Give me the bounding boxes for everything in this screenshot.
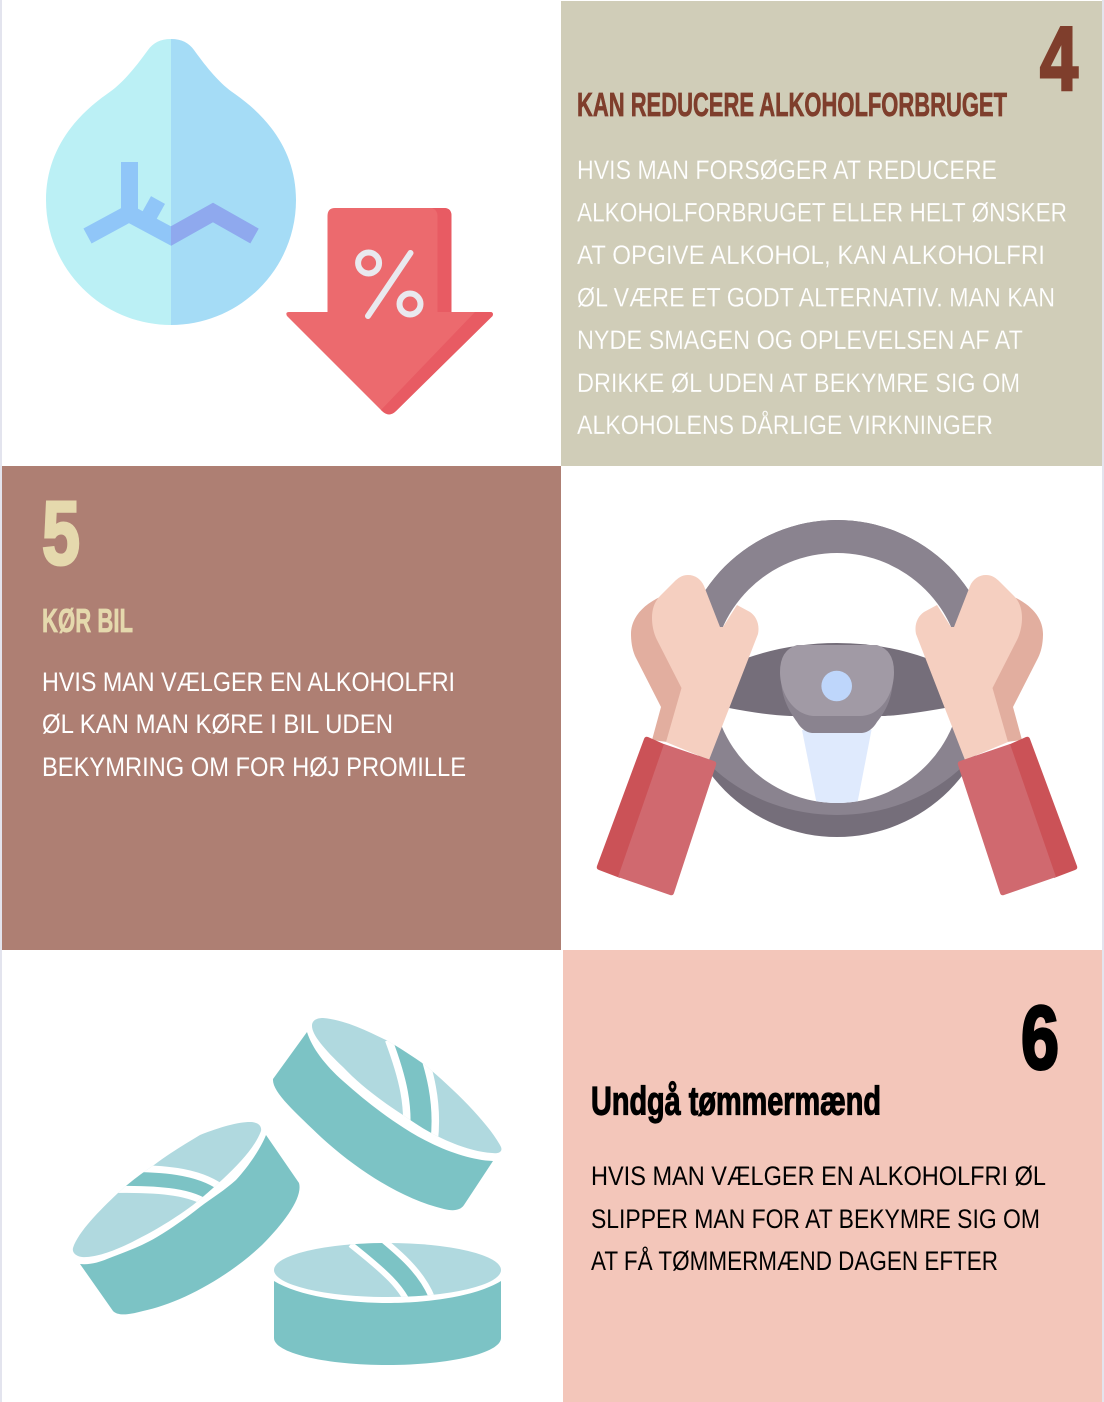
lower spoke [802,730,872,805]
panel: 5 drive a car [2,466,561,950]
upper right pill [273,1018,501,1210]
body text: HVIS MAN VÆLGER EN ALKOHOLFRI [42,667,455,697]
body text: SLIPPER MAN FOR AT BEKYMRE SIG OM [591,1204,1040,1234]
body text: DRIKKE ØL UDEN AT BEKYMRE SIG OM [577,368,1020,398]
icon: water drop with molecule [46,39,296,325]
body text: HVIS MAN FORSØGER AT REDUCERE [577,155,997,185]
bottom pill [274,1235,501,1365]
number 6: 6 [1021,988,1059,1088]
horizontal spoke [729,643,945,716]
icon: three pills [73,1018,501,1365]
body text [42,667,466,782]
body text: ALKOHOLENS DÅRLIGE VIRKNINGER [577,409,993,440]
left pill [73,1122,300,1314]
icon: steering wheel with hands [597,517,1077,895]
panel: 6 avoid hangovers [563,950,1102,1402]
body text [577,155,1067,440]
icon: red down arrow with percent sign [286,208,493,414]
body text: HVIS MAN VÆLGER EN ALKOHOLFRI ØL [591,1161,1046,1191]
right hand and sleeve [915,575,1077,895]
body text: ØL KAN MAN KØRE I BIL UDEN [42,709,393,739]
body text: NYDE SMAGEN OG OPLEVELSEN AF AT [577,325,1023,355]
number 5: 5 [42,484,80,584]
body text [591,1161,1046,1276]
number 4: 4 [1040,10,1078,110]
panel: 4 reduce alcohol consumption [561,1,1102,466]
hub [780,645,894,733]
left hand and sleeve [597,575,759,895]
heading: Undgå tømmermænd [591,1080,881,1124]
heading: KØR BIL [42,602,133,639]
body text: BEKYMRING OM FOR HØJ PROMILLE [42,752,466,782]
wheel rim [698,520,976,837]
body text: AT OPGIVE ALKOHOL, KAN ALKOHOLFRI [577,240,1045,270]
body text: AT FÅ TØMMERMÆND DAGEN EFTER [591,1245,998,1276]
